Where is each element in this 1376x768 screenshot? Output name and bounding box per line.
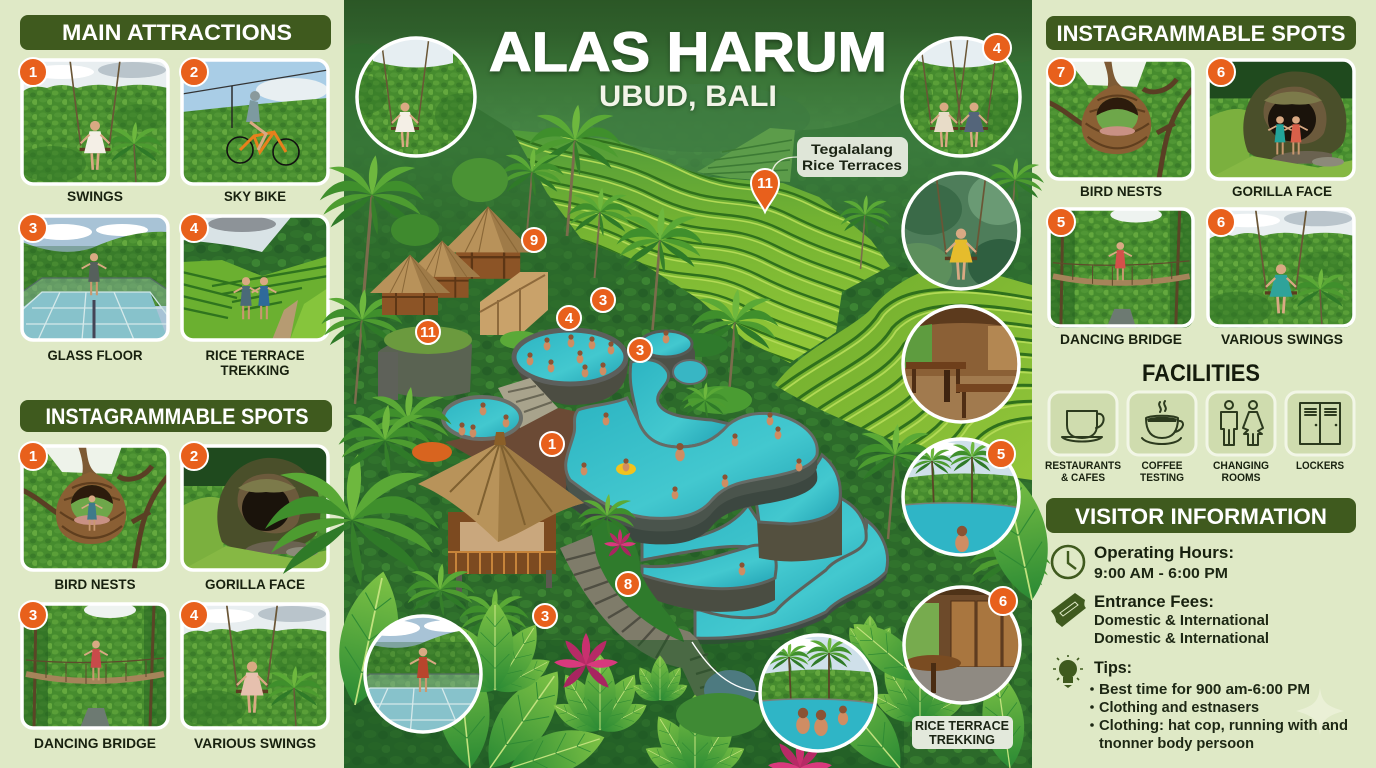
heading: instagrammable spots: INSTAGRAMMABLE SPOTS (46, 404, 308, 429)
panel: instagrammable spots left (19, 400, 332, 751)
map number markers: 3 (636, 342, 644, 359)
photo card: gorilla face: GORILLA FACE (1232, 183, 1332, 199)
photo circle: swing top left (355, 36, 477, 158)
photo card: dancing bridge: DANCING BRIDGE (34, 735, 156, 751)
text: tips (1090, 658, 1348, 752)
callout: rice terrace trekking: TREKKING (929, 733, 995, 747)
icon: changing rooms: ROOMS (1222, 472, 1260, 484)
icon: light bulb (1053, 655, 1083, 688)
rice terraces upper hill (512, 130, 890, 363)
pool: infinity tiers (642, 455, 888, 644)
heading: visitor information: VISITOR INFORMATION (1075, 504, 1327, 529)
heading: instagrammable spots: INSTAGRAMMABLE SPOTS (1056, 21, 1346, 46)
photo card: sky bike: SKY BIKE (224, 188, 286, 204)
map number markers: 4 (565, 310, 574, 327)
stairs upper (498, 378, 558, 428)
photo circle: yellow dress swing (901, 171, 1021, 291)
icon: coffee testing: COFFEE (1142, 460, 1182, 472)
photo card: bird nests: 7 (1057, 64, 1065, 81)
icon: lockers: LOCKERS (1296, 460, 1344, 472)
text: operating hours (1094, 543, 1234, 582)
photo card: various swings (178, 586, 328, 751)
map number markers: 1 (548, 436, 556, 453)
photo circle: double swing: 4 (993, 40, 1002, 57)
map number markers: 8 (624, 576, 632, 593)
photo card: rice terrace trekking (180, 214, 328, 378)
callout: Tegalalang rice terraces: Rice Terraces (802, 157, 902, 173)
photo card: glass floor (19, 214, 168, 363)
gazebo (418, 432, 584, 592)
callout: Tegalalang rice terraces (772, 137, 908, 177)
text: tips: Clothing and estnasers (1099, 700, 1259, 716)
icon: changing rooms: CHANGING (1213, 460, 1269, 472)
photo card: rice terrace trekking: 4 (190, 220, 199, 237)
right panel background (1032, 0, 1376, 768)
subtitle: UBUD, BALI (599, 80, 777, 113)
text: entrance fees: Domestic & International (1094, 613, 1269, 629)
photo circle: infinity pool (692, 631, 891, 755)
photo card: dancing bridge: 3 (29, 607, 37, 624)
photo circle: double swing (900, 33, 1022, 158)
text: operating hours: Operating Hours: (1094, 543, 1234, 562)
heading: visitor information (1046, 498, 1356, 533)
photo circle: pool: 5 (997, 446, 1005, 463)
text: entrance fees (1094, 592, 1269, 647)
heading: main attractions (20, 15, 331, 50)
icon: coffee testing: TESTING (1140, 472, 1184, 484)
icon: changing rooms (1207, 392, 1275, 484)
text: operating hours: 9:00 AM - 6:00 PM (1094, 566, 1228, 582)
callout: Tegalalang rice terraces: Tegalalang (811, 141, 893, 157)
jungle background (344, 0, 1032, 768)
heading: main attractions: MAIN ATTRACTIONS (62, 20, 292, 45)
photo card: various swings (1206, 207, 1356, 344)
stone terrace and garden (378, 326, 472, 400)
garden bushes near pool (500, 331, 752, 414)
rice terraces right hill (775, 273, 1032, 480)
heading: facilities: FACILITIES (1142, 360, 1260, 387)
thatched huts (370, 207, 548, 335)
sparkle decoration (1296, 688, 1344, 735)
photo card: dancing bridge: DANCING BRIDGE (1060, 331, 1182, 347)
photo card: glass floor: GLASS FLOOR (48, 347, 142, 363)
map number markers: 3 (541, 608, 549, 625)
palm trees (320, 105, 1044, 539)
photo card: bird nests: BIRD NESTS (54, 576, 136, 592)
panel: central illustrated map (265, 0, 1050, 768)
photo circle: restaurant (901, 304, 1021, 424)
text: tips: Clothing: hat cop, running with and (1099, 718, 1348, 734)
photo card: various swings: 6 (1217, 214, 1225, 231)
text: entrance fees: Entrance Fees: (1094, 592, 1214, 611)
icon: restaurants and cafes: & CAFES (1061, 472, 1105, 484)
icon: ticket (1051, 593, 1086, 627)
photo card: sky bike (180, 58, 328, 204)
tropical plants foreground (265, 382, 1059, 768)
photo card: bird nests: 1 (29, 448, 37, 465)
icon: coffee testing (1128, 392, 1196, 484)
deck (445, 408, 595, 496)
map number markers (416, 228, 652, 628)
left panel background (0, 0, 345, 768)
heading: instagrammable spots (1046, 16, 1356, 50)
map number markers: 11 (420, 324, 436, 341)
pin marker 11: 11 (757, 175, 773, 192)
panel: instagrammable spots right (1046, 16, 1356, 347)
callout: rice terrace trekking: RICE TERRACE (915, 719, 1009, 733)
stairs lower (560, 535, 726, 702)
photo card: rice terrace trekking: TREKKING (220, 362, 290, 378)
photo card: bird nests (19, 442, 168, 592)
photo circle: glass floor (363, 614, 483, 734)
photo card: bird nests (1047, 58, 1193, 199)
photo card: sky bike: 2 (190, 64, 198, 81)
photo card: gorilla face (180, 442, 328, 592)
callout: rice terrace trekking (912, 716, 1013, 749)
photo card: various swings: VARIOUS SWINGS (194, 735, 316, 751)
photo card: dancing bridge: 5 (1057, 214, 1065, 231)
icon: restaurants and cafes: RESTAURANTS (1045, 460, 1121, 472)
panel: visitor information (1046, 498, 1356, 752)
photo card: swings: 1 (29, 64, 37, 81)
pool: upper right small pools (640, 330, 707, 384)
photo card: glass floor: 3 (29, 220, 37, 237)
icon: restaurants and cafes (1045, 392, 1121, 484)
photo card: dancing bridge (19, 601, 168, 751)
garden bed (578, 494, 684, 642)
text: entrance fees: Domestic & International (1094, 631, 1269, 647)
pool: round upper pool (514, 330, 628, 405)
panel: facilities (1045, 360, 1354, 484)
far terraces (697, 128, 795, 182)
photo card: dancing bridge (1047, 207, 1194, 347)
photo card: rice terrace trekking: RICE TERRACE (206, 347, 304, 363)
photo circle: pool (901, 437, 1021, 557)
title: ALAS HARUM (489, 20, 887, 83)
photo card: various swings: 4 (190, 607, 199, 624)
map number markers: 3 (599, 292, 607, 309)
photo card: bird nests: BIRD NESTS (1080, 183, 1162, 199)
icon: clock (1052, 546, 1084, 578)
photo circle: lockers: 6 (999, 593, 1007, 610)
pin marker 11 (751, 169, 779, 212)
photo card: gorilla face: GORILLA FACE (205, 576, 305, 592)
photo card: various swings: VARIOUS SWINGS (1221, 331, 1343, 347)
text: tips: Tips: (1094, 658, 1132, 677)
panel: main attractions (18, 15, 331, 378)
map number markers: 9 (530, 232, 538, 249)
photo card: swings (18, 49, 168, 204)
photo card: gorilla face (1207, 58, 1354, 199)
icon: lockers (1286, 392, 1354, 472)
photo card: gorilla face: 2 (190, 448, 198, 465)
photo circle: lockers (902, 585, 1022, 705)
text: tips: Best time for 900 am-6:00 PM (1099, 682, 1310, 698)
pool: main lagoon with swimmers (566, 360, 817, 544)
photo card: swings: SWINGS (67, 188, 123, 204)
photo card: gorilla face: 6 (1217, 64, 1225, 81)
text: tips: tnonner body persoon (1099, 736, 1254, 752)
pool: lower left small pool (443, 397, 521, 439)
